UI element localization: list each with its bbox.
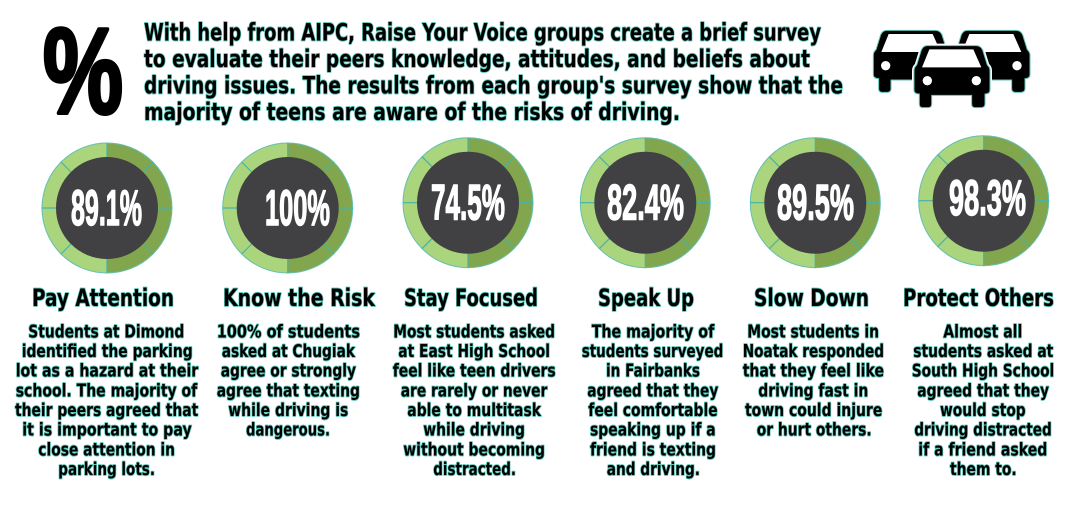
panel: speak up: [580, 138, 723, 480]
text: know the risk description: dangerous.: [246, 421, 330, 441]
text: stay focused description: [393, 322, 556, 480]
heading: pay attention: Pay Attention: [32, 284, 174, 312]
text: slow down description: that they feel like: [743, 362, 884, 382]
text: speak up description: students surveyed: [582, 342, 723, 362]
donut: 100%: 100%: [265, 180, 330, 236]
donut: 98.3%: [919, 136, 1049, 266]
text: pay attention description: [15, 322, 199, 480]
donut: 82.4%: [580, 138, 710, 268]
icon: percent sign: %: [43, 3, 123, 139]
text: know the risk description: agree or strongly: [221, 362, 356, 382]
text: speak up description: in Fairbanks: [606, 362, 700, 382]
text: protect others description: agreed that they: [917, 381, 1049, 401]
text: pay attention description: identified the parking: [22, 342, 193, 362]
donut: 74.5%: 74.5%: [431, 174, 505, 230]
text: protect others description: them to.: [950, 460, 1017, 480]
text: speak up description: The majority of: [592, 322, 715, 342]
text: pay attention description: Students at Dimond: [28, 322, 184, 342]
text: pay attention description: school. The majority of: [16, 381, 198, 401]
text: pay attention description: close attention in: [38, 440, 175, 460]
text: slow down description: town could injure: [745, 401, 882, 421]
panel: slow down: [743, 138, 884, 441]
text: stay focused description: are rarely or never: [401, 381, 548, 401]
text: protect others description: if a friend asked: [918, 440, 1047, 460]
text: stay focused description: without becoming: [403, 440, 545, 460]
text: speak up description: feel comfortable: [588, 401, 718, 421]
text: stay focused description: able to multitask: [407, 401, 541, 421]
donut: 74.5%: [403, 138, 533, 268]
text: speak up description: [582, 322, 723, 480]
text: protect others description: would stop: [940, 401, 1026, 421]
donut: 89.5%: 89.5%: [777, 174, 854, 230]
text: slow down description: or hurt others.: [757, 421, 872, 441]
donut: 100%: [223, 143, 353, 273]
text: pay attention description: their peers agreed that: [15, 401, 198, 421]
text: know the risk description: agree that texting: [217, 381, 360, 401]
intro text block: [144, 18, 843, 126]
text: stay focused description: distracted.: [433, 460, 516, 480]
text: slow down description: Noatak responded: [743, 342, 884, 362]
text: speak up description: friend is texting: [590, 440, 716, 460]
text: pay attention description: parking lots.: [58, 460, 155, 480]
intro text block: driving issues. The results from each group's survey show that the: [144, 72, 843, 100]
panel: pay attention: [15, 143, 199, 480]
heading: slow down: Slow Down: [754, 284, 869, 312]
text: slow down description: driving fast in: [758, 381, 868, 401]
text: pay attention description: it is important to pay: [22, 421, 192, 441]
text: speak up description: speaking up if a: [590, 421, 716, 441]
panel: know the risk: [217, 143, 376, 441]
icon: three cars: [873, 30, 1030, 108]
text: stay focused description: Most students asked: [393, 322, 555, 342]
intro text block: majority of teens are aware of the risks of driving.: [144, 98, 680, 126]
text: stay focused description: at East High School: [398, 342, 550, 362]
text: speak up description: and driving.: [607, 460, 700, 480]
text: pay attention description: lot as a hazard at their: [16, 362, 199, 382]
text: know the risk description: 100% of students: [217, 322, 360, 342]
donut: 82.4%: 82.4%: [607, 174, 684, 230]
text: stay focused description: while driving: [423, 421, 525, 441]
text: protect others description: Almost all: [943, 322, 1022, 342]
text: protect others description: [912, 322, 1054, 480]
intro text block: to evaluate their peers knowledge, attitudes, and beliefs about: [144, 45, 810, 73]
text: know the risk description: asked at Chugiak: [222, 342, 355, 362]
text: know the risk description: while driving is: [228, 401, 348, 421]
heading: know the risk: Know the Risk: [223, 284, 376, 312]
heading: speak up: Speak Up: [598, 284, 694, 312]
text: speak up description: agreed that they: [587, 381, 719, 401]
panel: stay focused: [393, 138, 556, 480]
text: slow down description: Most students in: [747, 322, 879, 342]
donut: 89.1%: 89.1%: [71, 180, 142, 236]
text: know the risk description: [217, 322, 360, 441]
intro text block: With help from AIPC, Raise Your Voice groups create a brief survey: [144, 18, 821, 46]
panel: protect others: [903, 136, 1054, 480]
text: slow down description: [743, 322, 884, 441]
text: stay focused description: feel like teen drivers: [393, 362, 556, 382]
heading: stay focused: Stay Focused: [404, 284, 538, 312]
donut: 89.1%: [42, 143, 172, 273]
donut: 89.5%: [750, 138, 880, 268]
